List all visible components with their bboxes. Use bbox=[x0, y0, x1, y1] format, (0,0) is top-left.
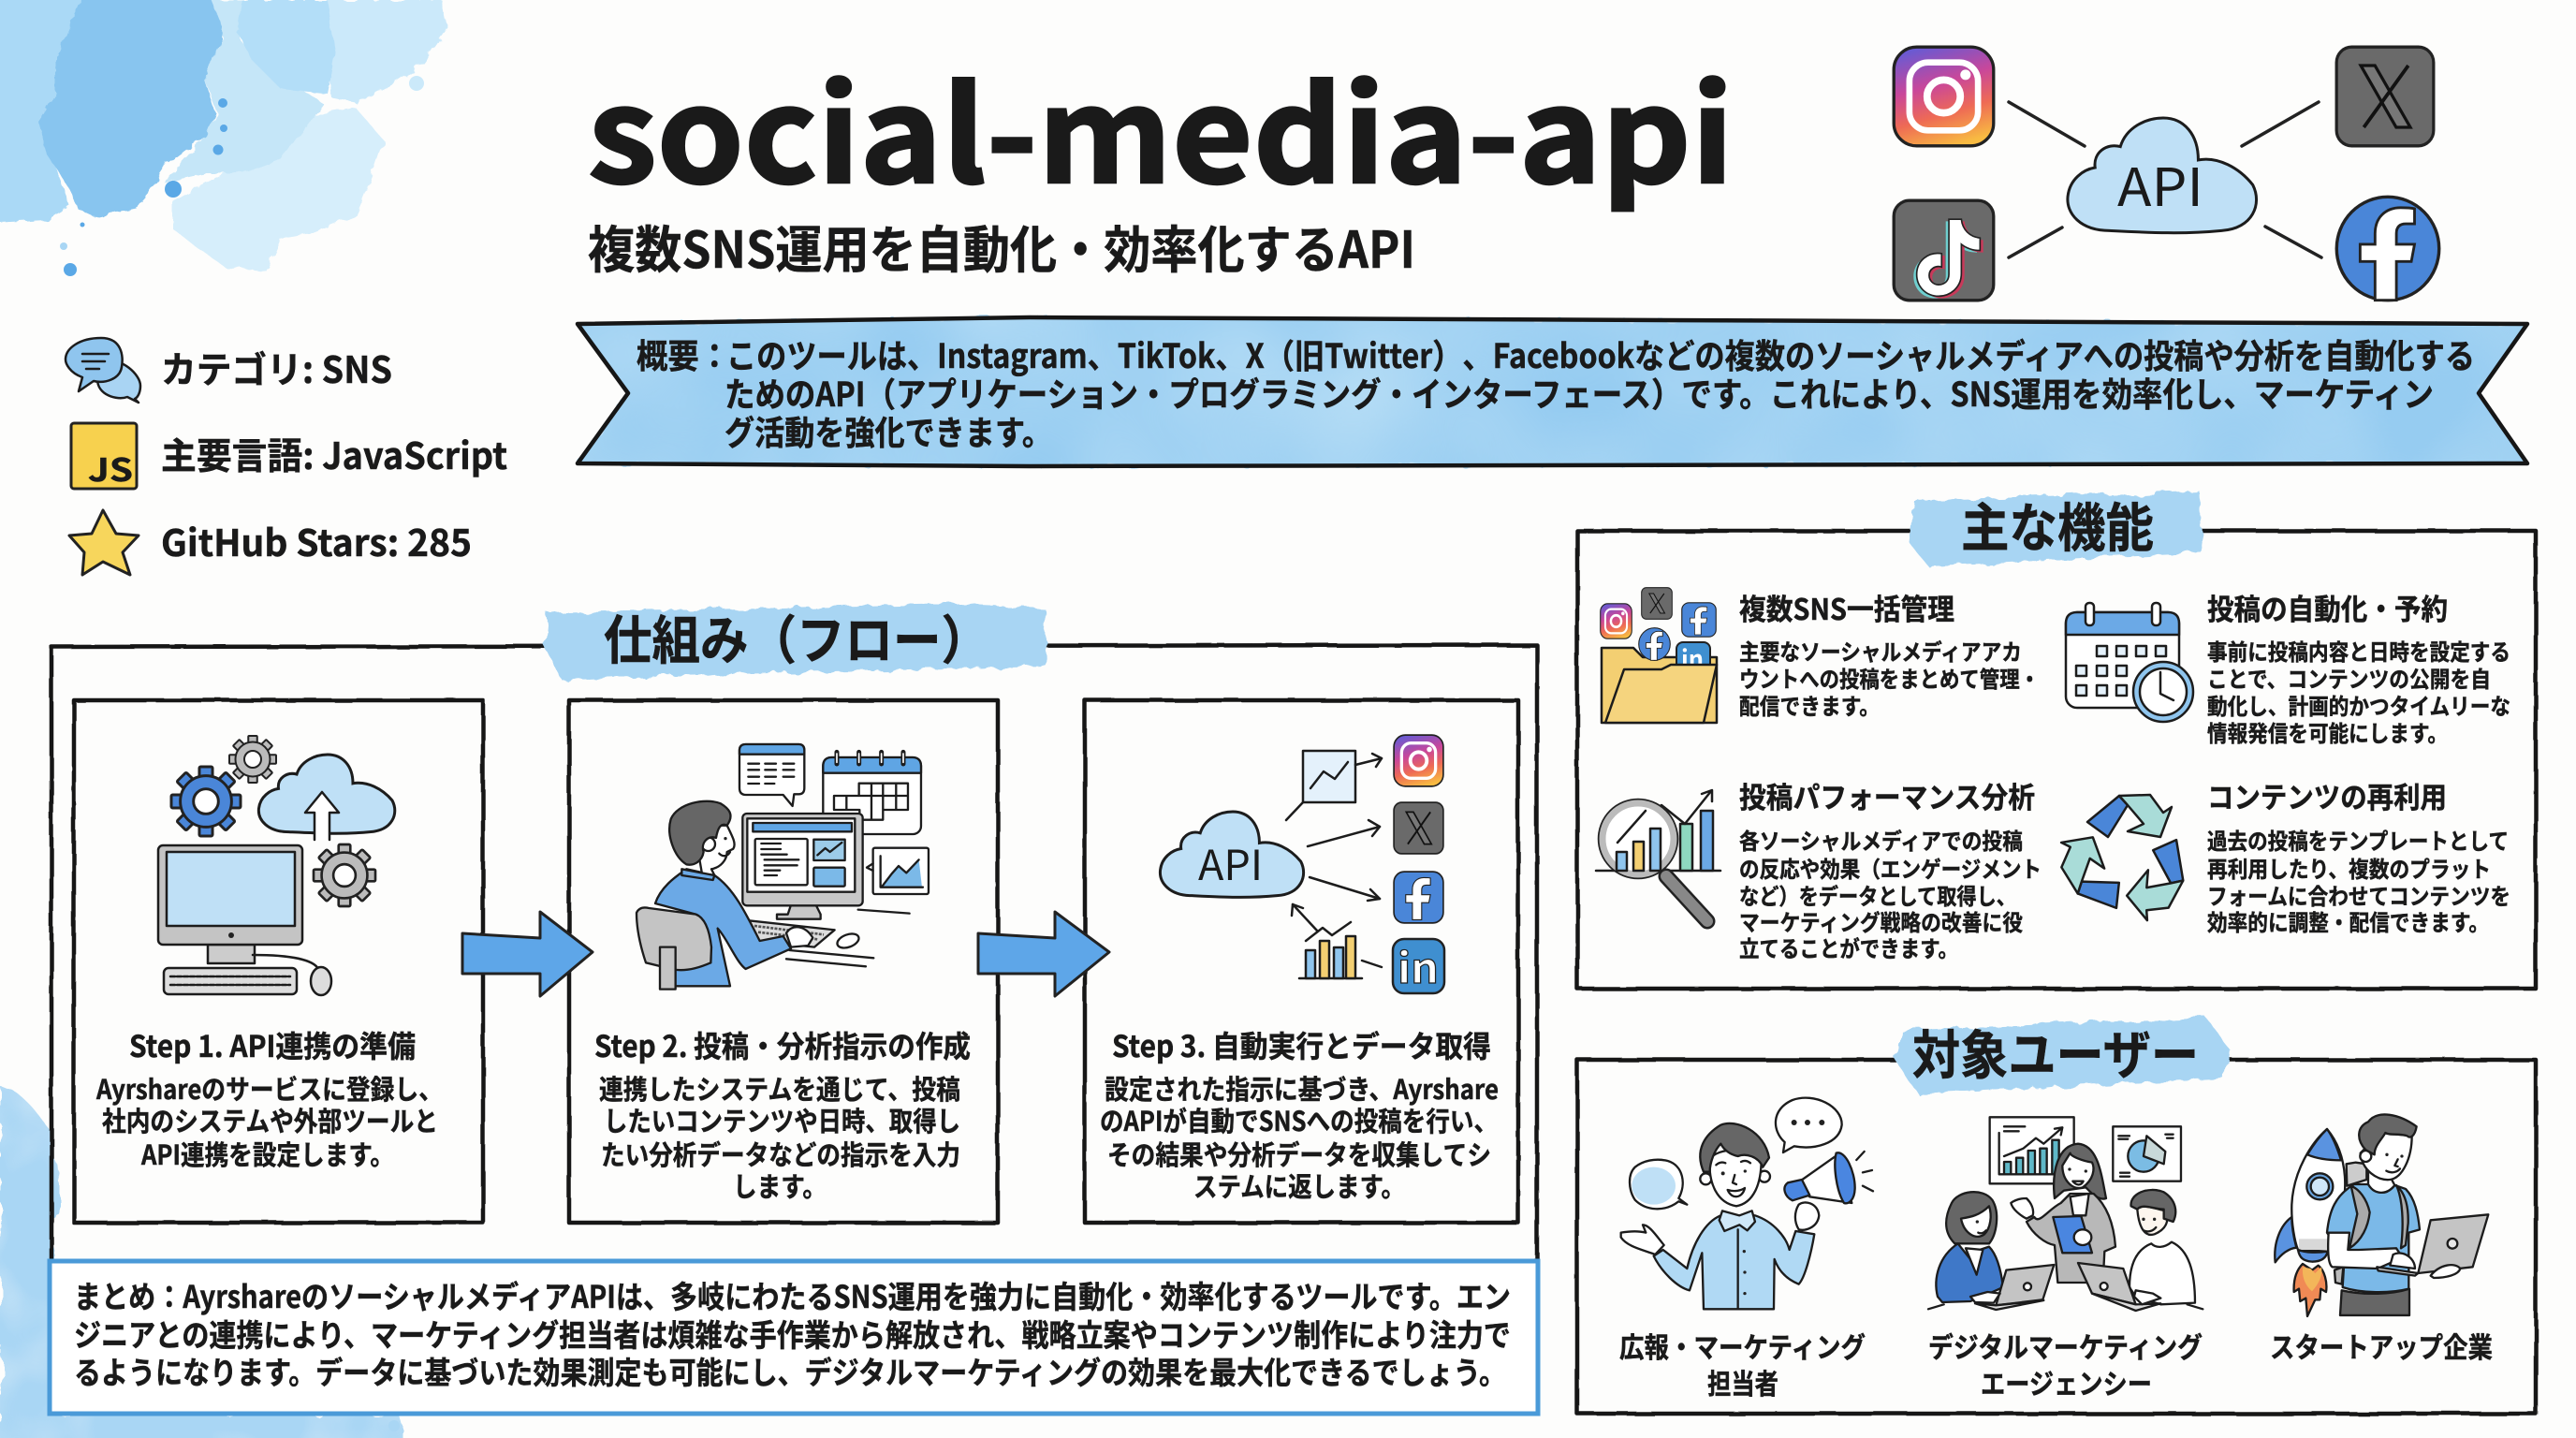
icon: chat bubbles bbox=[66, 338, 140, 403]
icon: API cloud bbox=[2068, 118, 2257, 233]
step 2 text: します。 bbox=[733, 1166, 827, 1205]
step 2 text: たい分析データなどの指示を入力 bbox=[601, 1134, 960, 1173]
subtitle: 複数SNS運用を自動化・効率化するAPI bbox=[588, 209, 1415, 283]
label: エージェンシー bbox=[1981, 1361, 2152, 1402]
label: デジタルマーケティング bbox=[1928, 1325, 2203, 1366]
icon: recycle arrows bbox=[2051, 795, 2200, 927]
feature: analytics bbox=[1596, 774, 2042, 963]
heading: 投稿パフォーマンス分析 bbox=[1739, 774, 2035, 816]
step 1 bbox=[74, 700, 483, 1223]
heading: features: 主な機能 bbox=[1961, 487, 2154, 563]
overview text bbox=[637, 330, 2475, 455]
illustration: API to social networks: in bbox=[1398, 935, 1439, 995]
heading: コンテンツの再利用 bbox=[2207, 774, 2447, 816]
description: フォームに合わせてコンテンツを bbox=[2207, 878, 2510, 911]
step 2 heading: Step 2. 投稿・分析指示の作成 bbox=[594, 1023, 971, 1066]
feature: scheduling bbox=[2066, 586, 2510, 748]
heading: features bbox=[1910, 487, 2202, 566]
step 1 text: API連携を設定します。 bbox=[140, 1134, 394, 1173]
heading: 投稿の自動化・予約 bbox=[2207, 586, 2448, 628]
icon: API cloud: API bbox=[2117, 146, 2203, 222]
description: 立てることができます。 bbox=[1739, 931, 1958, 963]
icon: JavaScript: JS bbox=[88, 445, 133, 491]
description: ウントへの投稿をまとめて管理・ bbox=[1739, 661, 2040, 694]
overview text: グ活動を強化できます。 bbox=[724, 406, 1052, 455]
user: startups bbox=[2270, 1114, 2493, 1366]
description: 過去の投稿をテンプレートとして bbox=[2207, 823, 2509, 856]
description: マーケティング戦略の改善に役 bbox=[1739, 904, 2023, 937]
heading: 複数SNS一括管理 bbox=[1739, 586, 1954, 628]
title: social-media-api bbox=[588, 32, 1734, 221]
description: ことで、コンテンツの公開を自 bbox=[2207, 661, 2491, 694]
step 1 text: 社内のシステムや外部ツールと bbox=[102, 1100, 438, 1139]
description: 情報発信を可能にします。 bbox=[2207, 715, 2448, 748]
label: 担当者 bbox=[1707, 1361, 1778, 1402]
arrow: step 1 to 2 bbox=[462, 912, 593, 996]
panel: features bbox=[1577, 487, 2536, 989]
illustration: founder with rocket bbox=[2275, 1114, 2488, 1316]
connector lines bbox=[2009, 102, 2321, 257]
summary text bbox=[74, 1272, 1511, 1393]
heading: flow: 仕組み（フロー） bbox=[604, 599, 989, 675]
overview ribbon bbox=[578, 317, 2527, 466]
illustration: person at desk bbox=[637, 744, 929, 990]
step 2 text: したいコンテンツや日時、取得し bbox=[604, 1100, 960, 1139]
icon: folder with SNS logos: in bbox=[1681, 639, 1704, 676]
icon: X bbox=[2336, 47, 2434, 146]
step 3 text: 設定された指示に基づき、Ayrshare bbox=[1105, 1068, 1499, 1108]
step 1 text bbox=[95, 1068, 443, 1173]
step 2 text bbox=[599, 1068, 960, 1205]
description: 効率的に調整・配信できます。 bbox=[2207, 904, 2489, 937]
meta list bbox=[66, 338, 507, 575]
icon: magnifier over bar chart bbox=[1596, 790, 1720, 921]
overview text: 概要： bbox=[637, 330, 730, 378]
label bbox=[1619, 1325, 1866, 1402]
step 3 text: その結果や分析データを収集してシ bbox=[1107, 1134, 1491, 1173]
description bbox=[1739, 823, 2042, 963]
description: など）をデータとして取得し、 bbox=[1739, 878, 2016, 911]
summary text: るようになります。データに基づいた効果測定も可能にし、デジタルマーケティングの効果を最大化できるでしょう。 bbox=[74, 1348, 1506, 1393]
icon: JavaScript bbox=[71, 423, 137, 491]
step 2 text: 連携したシステムを通じて、投稿 bbox=[599, 1068, 960, 1108]
overview text: ためのAPI（アプリケーション・プログラミング・インターフェース）です。これにより、SNS運用を効率化し、マーケティン bbox=[724, 368, 2434, 417]
step 1 heading: Step 1. API連携の準備 bbox=[129, 1023, 416, 1066]
description: の反応や効果（エンゲージメント bbox=[1739, 851, 2042, 884]
step 3 heading: Step 3. 自動実行とデータ取得 bbox=[1112, 1023, 1491, 1066]
label: 広報・マーケティング bbox=[1619, 1325, 1866, 1366]
stars label: GitHub Stars: 285 bbox=[161, 515, 472, 567]
summary text: ジニアとの連携により、マーケティング担当者は煩雑な手作業から解放され、戦略立案やコンテンツ制作により注力で bbox=[74, 1311, 1511, 1356]
description bbox=[1739, 634, 2040, 721]
description bbox=[2207, 634, 2510, 748]
panel: target users bbox=[1577, 1014, 2536, 1414]
step 2 bbox=[569, 700, 998, 1223]
network graphic bbox=[1894, 47, 2439, 301]
language label: 主要言語: JavaScript bbox=[161, 428, 507, 480]
description bbox=[2207, 823, 2510, 937]
icon: folder with SNS logos bbox=[1601, 588, 1717, 723]
heading: target users: 対象ユーザー bbox=[1912, 1014, 2199, 1090]
user: digital agency bbox=[1928, 1117, 2203, 1402]
icon: calendar and clock bbox=[2066, 603, 2193, 722]
icon: Facebook bbox=[2336, 197, 2439, 301]
description: 配信できます。 bbox=[1739, 688, 1880, 721]
panel: how it works bbox=[51, 599, 1537, 1263]
description: 事前に投稿内容と日時を設定する bbox=[2207, 634, 2510, 667]
step 1 text: Ayrshareのサービスに登録し、 bbox=[95, 1068, 443, 1108]
user: PR and marketing bbox=[1619, 1098, 1873, 1402]
step 3 bbox=[1085, 700, 1518, 1223]
icon: Instagram bbox=[1894, 47, 1994, 146]
icon: TikTok bbox=[1894, 200, 1994, 301]
description: 再利用したり、複数のプラット bbox=[2207, 851, 2491, 884]
arrow: step 2 to 3 bbox=[978, 912, 1109, 996]
illustration: person with megaphone bbox=[1621, 1098, 1873, 1309]
illustration: API to social networks bbox=[1160, 735, 1444, 995]
feature: multi SNS management bbox=[1601, 586, 2040, 723]
feature: content reuse bbox=[2051, 774, 2510, 937]
summary box bbox=[50, 1261, 1538, 1414]
label bbox=[1928, 1325, 2203, 1402]
illustration: team with charts bbox=[1928, 1117, 2203, 1311]
description: 各ソーシャルメディアでの投稿 bbox=[1739, 823, 2023, 856]
description: 主要なソーシャルメディアアカ bbox=[1739, 634, 2022, 667]
step 3 text bbox=[1100, 1068, 1499, 1205]
illustration: computer and cloud bbox=[158, 736, 395, 995]
description: 動化し、計画的かつタイムリーな bbox=[2207, 688, 2510, 721]
icon: star bbox=[69, 510, 139, 575]
illustration: API to social networks: API bbox=[1198, 832, 1263, 892]
summary text: まとめ：AyrshareのソーシャルメディアAPIは、多岐にわたるSNS運用を強力に自動化・効率化するツールです。エン bbox=[74, 1272, 1511, 1317]
label: スタートアップ企業 bbox=[2270, 1325, 2493, 1366]
step 3 text: ステムに返します。 bbox=[1193, 1166, 1405, 1205]
watercolor splash: top left bbox=[0, 0, 447, 276]
category label: カテゴリ: SNS bbox=[161, 342, 392, 394]
step 3 text: のAPIが自動でSNSへの投稿を行い、 bbox=[1100, 1100, 1498, 1139]
watercolor splash: bottom left bbox=[0, 1086, 402, 1438]
